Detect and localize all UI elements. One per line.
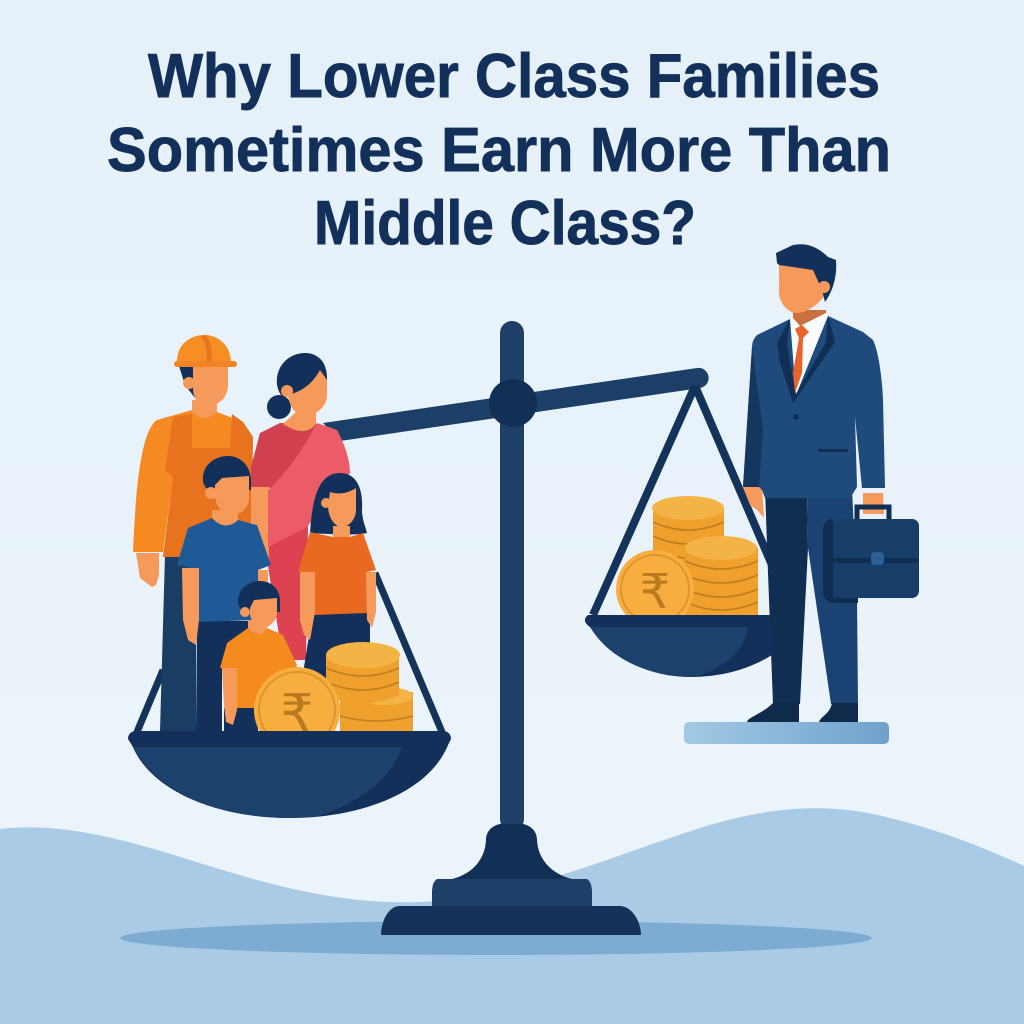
left pan strings [137, 573, 442, 732]
left coins [254, 642, 413, 753]
title [107, 42, 891, 258]
right pan [585, 615, 772, 677]
father [133, 335, 253, 731]
title: Sometimes Earn More Than [107, 116, 891, 185]
hair [776, 244, 836, 302]
right pan strings [593, 386, 772, 615]
left coins: ₹ [280, 685, 314, 743]
lapels [777, 319, 796, 403]
head [779, 263, 825, 313]
businessman [743, 244, 919, 722]
left pan [128, 731, 451, 818]
button and pocket [793, 414, 799, 420]
family [133, 335, 376, 731]
title: Why Lower Class Families [148, 42, 880, 111]
girl [298, 473, 376, 680]
white shirt [788, 312, 830, 396]
ear [818, 281, 830, 293]
businessman platform [684, 722, 889, 744]
jacket shadow [743, 347, 763, 487]
scale base [381, 824, 641, 935]
mother [251, 353, 350, 660]
scale beam [323, 368, 709, 441]
background hills [0, 808, 1024, 1024]
boy [177, 456, 271, 731]
trousers [765, 488, 808, 704]
ground shadow [120, 921, 872, 955]
right hand [863, 493, 884, 514]
jacket [743, 316, 885, 498]
neck [793, 310, 826, 326]
briefcase [823, 507, 919, 603]
balance scale [323, 321, 709, 935]
left hand [743, 487, 764, 518]
small child [220, 581, 297, 731]
tie [793, 325, 809, 393]
title: Middle Class? [314, 189, 696, 258]
shoes [747, 703, 799, 722]
scale post [500, 321, 524, 831]
right coins [616, 496, 758, 628]
scale pivot [489, 379, 537, 427]
right coins: ₹ [640, 566, 670, 619]
hard hat [174, 335, 237, 367]
